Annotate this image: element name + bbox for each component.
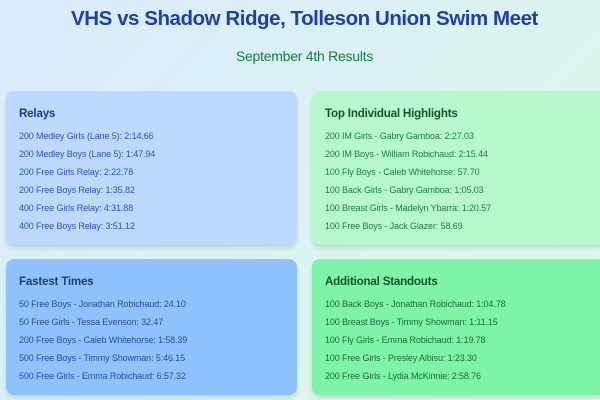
panel: additional standouts [312, 259, 600, 395]
highlight 1: 200 IM Girls - Gabry Gamboa: 2:27.03 [325, 131, 474, 141]
relay result 6: 400 Free Boys Relay: 3:51.12 [19, 221, 135, 231]
relay result 5: 400 Free Girls Relay: 4:31.88 [19, 203, 133, 213]
fastest time 4: 500 Free Boys - Timmy Showman: 5:46.15 [19, 353, 185, 363]
standout 2: 100 Breast Boys - Timmy Showman: 1:11.15 [325, 317, 498, 327]
heading: additional standouts: Additional Standouts [325, 275, 438, 288]
fastest time 1: 50 Free Boys - Jonathan Robichaud: 24.10 [19, 299, 186, 309]
title: VHS vs Shadow Ridge, Tolleson Union Swim Meet [71, 7, 538, 30]
standout 1: 100 Back Boys - Jonathan Robichaud: 1:04.78 [325, 299, 505, 309]
heading: fastest times: Fastest Times [19, 275, 94, 288]
panel: fastest times [6, 259, 297, 395]
highlight 3: 100 Fly Boys - Caleb Whitehorse: 57.70 [325, 167, 480, 177]
relay result 4: 200 Free Boys Relay: 1:35.82 [19, 185, 135, 195]
heading: relays: Relays [19, 107, 55, 120]
fastest time 3: 200 Free Boys - Caleb Whitehorse: 1:58.39 [19, 335, 187, 345]
fastest time 5: 500 Free Girls - Emma Robichaud: 6:57.32 [19, 371, 186, 381]
heading: top individual highlights: Top Individual Highlights [325, 107, 458, 120]
relay result 3: 200 Free Girls Relay: 2:22.78 [19, 167, 133, 177]
highlight 4: 100 Back Girls - Gabry Gamboa: 1:05.03 [325, 185, 484, 195]
fastest time 2: 50 Free Girls - Tessa Evenson: 32.47 [19, 317, 163, 327]
panel: relays [6, 91, 297, 245]
standout 3: 100 Fly Girls - Emma Robichaud: 1:19.78 [325, 335, 485, 345]
relay result 1: 200 Medley Girls (Lane 5): 2:14.66 [19, 131, 154, 141]
relay result 2: 200 Medley Boys (Lane 5): 1:47.94 [19, 149, 155, 159]
subtitle: September 4th Results [236, 48, 373, 64]
highlight 5: 100 Breast Girls - Madelyn Ybarra: 1:20.57 [325, 203, 491, 213]
highlight 2: 200 IM Boys - William Robichaud: 2:15.44 [325, 149, 488, 159]
standout 4: 100 Free Girls - Presley Albisu: 1:23.30 [325, 353, 477, 363]
panel: top individual highlights [312, 91, 600, 245]
highlight 6: 100 Free Boys - Jack Glazer: 58.69 [325, 221, 462, 231]
standout 5: 200 Free Girls - Lydia McKinnie: 2:58.76 [325, 371, 481, 381]
